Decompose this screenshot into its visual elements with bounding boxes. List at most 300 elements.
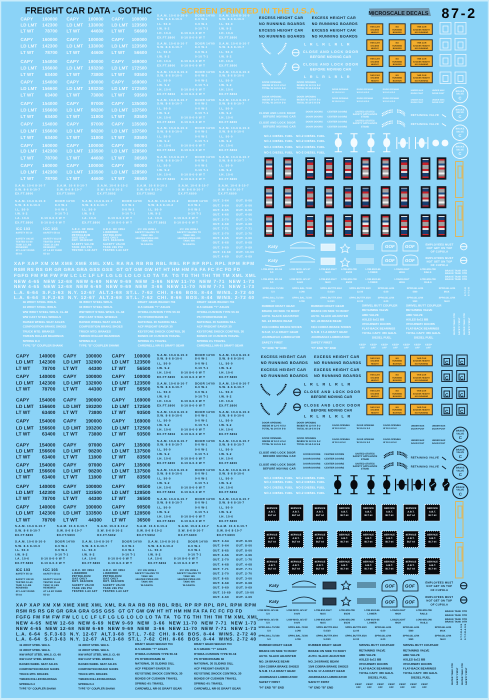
panel: black stenciled stamps: SERVICE bbox=[315, 507, 326, 510]
panel: white reporting marks and dates: FGFG FM FM FW FW LC LC LF LF LG LG LO LO LO TA TA TG TG THI THI TM TM XML XML bbox=[14, 273, 256, 278]
panel: lower right equipment lists: DIESEL FUEL bbox=[368, 676, 387, 680]
panel: white equipment lists: RAISED WHEEL SEAT AXLES bbox=[23, 320, 65, 324]
panel: upper low-mod and spring rows bbox=[261, 268, 467, 303]
panel: white dimension data blocks: S.W. 8-6 8-10-0 bbox=[219, 130, 244, 134]
panel: white dimension data blocks: 8-10 8-0-0 W T bbox=[108, 220, 132, 224]
panel: black reporting marks and dates: FGFG FM FM FW FW LC LC LF LF LG LG LO LO LO TA TA TG TG THI THI TM TM XML XML bbox=[16, 614, 258, 619]
panel: white dimension data blocks: 8-10 8-0-0 W T bbox=[108, 216, 132, 220]
panel: lower small stencils: CENTER DOORS bbox=[324, 467, 345, 470]
panel: lower yellow placards: BOARDS bbox=[393, 395, 402, 398]
panel: white capacity data: 169000 bbox=[132, 79, 147, 84]
panel: upper low-mod and spring rows: SPRG.BUTTR.6/20 bbox=[349, 297, 371, 300]
panel: upper small stencils: STAND bbox=[361, 125, 369, 128]
panel: upper white ring emblems: VALVE bbox=[456, 111, 464, 114]
panel: black capacity data: 11800 bbox=[88, 475, 102, 480]
panel: lower low-mod and spring rows: LOW-80/4-66 bbox=[365, 618, 380, 621]
panel: black dimension data blocks: 8-0 W-1 bbox=[55, 544, 68, 548]
panel: black outage column: OUT. 4-66 bbox=[213, 553, 229, 557]
panel: upper railroad logos: NOT GET ON TOP bbox=[427, 247, 452, 250]
panel: white dimension data blocks: 8-0 W-1 bbox=[188, 203, 201, 207]
panel: black capacity data: CAPY bbox=[63, 374, 77, 379]
panel: upper small stencils: CENTER DOORS bbox=[327, 116, 348, 119]
panel: upper railroad logos: OF CUPOLA bbox=[431, 264, 448, 267]
panel: upper small stencils: SAFETY APPLIANCE bbox=[353, 122, 378, 125]
panel: lower railroad logos: GOF bbox=[385, 584, 395, 588]
panel: upper white ring emblems: VALVE bbox=[456, 148, 464, 151]
panel: upper railroad logos bbox=[265, 241, 467, 267]
panel: black equipment lists: BONDS OF CUSHION TRAVEL bbox=[135, 676, 178, 680]
panel: upper small stencils: DOOR DOORS bbox=[306, 125, 323, 128]
panel: lower low-mod and spring rows: SPRG.BAL.71/108 bbox=[258, 635, 280, 638]
panel: black stenciled stamps: SERVICE bbox=[291, 560, 302, 564]
panel: black dimension data blocks: EX.FT.5800 bbox=[15, 561, 34, 565]
panel: lower black ring emblems: BRAKE bbox=[456, 467, 465, 470]
panel: lower yellow placards: RUNNING bbox=[392, 392, 402, 395]
panel: black ICC stencils: TANK 14 LBS bbox=[43, 584, 59, 587]
panel: black dimension data blocks: S.A.M. 10-6 8-10-7 bbox=[178, 524, 209, 528]
panel: lower door opening data: TOTAL W 14-5 H 5-8 bbox=[262, 428, 286, 431]
panel: black reporting marks and dates: NEW 4-65 NEW 12-68 NEW 6-69 NEW 9-69 NEW 3-66 NEW 11-70 NEW 7-71 NEW 1-73 bbox=[16, 620, 256, 625]
panel: lower yellow placards: NO RUNNING bbox=[415, 379, 428, 382]
panel: black equipment lists: SPRING 4½ TRAVEL bbox=[135, 682, 164, 686]
panel: white equipment lists: COMPOSITION BRAKE SHOES bbox=[79, 324, 123, 328]
panel: upper vertical water tank stencils: S T O R bbox=[464, 287, 467, 296]
panel: upper diesel fuel text: NO-2 DIESEL FUEL bbox=[296, 134, 325, 138]
panel: lower right equipment lists: AUTO. SLACK ADJUSTER bbox=[308, 654, 346, 658]
panel: black capacity data: 140000 bbox=[39, 484, 56, 489]
panel: black stenciled stamps: BLT 64 bbox=[292, 540, 301, 544]
panel: lower right equipment lists: RUBBER DRAFT GEAR bbox=[308, 643, 342, 647]
panel: lower low-mod and spring rows: SPRG.BUTTR.6/44 bbox=[316, 626, 338, 629]
panel: black dimension data blocks: DOOR 14'00 bbox=[195, 468, 215, 472]
panel: upper door opening data: DOOR OPENING bbox=[383, 88, 399, 91]
panel: white ICC stencils: TESTED 1-60 AFT bbox=[103, 249, 129, 252]
panel: white capacity data: LD LMT bbox=[20, 43, 37, 48]
panel: lower door opening data: DOOR POST bbox=[411, 442, 425, 445]
panel: white dimension data blocks: S.A.M. 10-6 8-10-7 bbox=[219, 98, 250, 102]
panel: upper yellow placards: BOARDS bbox=[393, 63, 402, 66]
panel: white capacity data: 154000 bbox=[42, 122, 58, 127]
panel: black equipment lists bbox=[19, 642, 242, 690]
panel: lower low-mod and spring rows: RAILS bbox=[420, 622, 428, 625]
panel: upper low-mod and spring rows: 5.0/20 bbox=[328, 291, 335, 294]
panel: black dimension data blocks: S.A.M. 10-6 8-10-0 bbox=[157, 353, 188, 357]
panel: upper yellow placards: THIS CAR bbox=[370, 58, 380, 60]
panel: black equipment lists: NATIONAL 30 SLIDING SILL bbox=[194, 662, 234, 666]
panel: lower yellow placards: HEIGHT bbox=[371, 379, 379, 382]
panel: white dimension data blocks: EX.FT.5802 bbox=[219, 148, 238, 152]
panel: white dimension data blocks: DOOR 14'00 bbox=[195, 42, 215, 46]
panel: black equipment lists: SPRING D-3 bbox=[78, 683, 94, 686]
panel: lower railroad logos: Katy bbox=[269, 583, 279, 588]
panel: white ICC stencils: 55-10 bbox=[16, 252, 23, 256]
panel: lower door opening data: DOOR POST bbox=[411, 428, 425, 430]
panel: black stenciled stamps: A.B.T. bbox=[293, 510, 300, 514]
panel: lower low-mod and spring rows: 12.00 bbox=[353, 629, 360, 632]
panel: lower door opening data: DOOR OPENING bbox=[383, 424, 401, 427]
panel: white outage column: OUT. 8-00 bbox=[236, 203, 252, 207]
panel: white equipment lists: D-5 GRADE "Y" AXLES bbox=[197, 305, 229, 309]
panel: black ICC stencils: AT LA BY RUND bbox=[16, 590, 35, 593]
panel: black equipment lists: 33 WROT STEEL WHLS. bbox=[19, 649, 51, 652]
panel: black ICC stencils: SAFETY VALVE bbox=[43, 578, 62, 581]
panel: white ICC stencils: TANK 265 PSI bbox=[103, 246, 123, 249]
panel: upper door opening data: TOTAL W 14-5 H 5-8 bbox=[297, 87, 321, 90]
panel: black ICC stencils: 55-10 bbox=[16, 594, 23, 596]
panel: upper right equipment lists: RUBBER DRAFT GEAR bbox=[262, 304, 296, 308]
panel: black capacity data: 140000 bbox=[39, 505, 56, 510]
panel: white outage column: OUT. 2-70 bbox=[236, 231, 252, 235]
panel: white capacity data: 169000 bbox=[132, 59, 147, 64]
panel: black stenciled stamps: SERVICE bbox=[291, 507, 302, 510]
panel: white outage column: OUT. 9-69 bbox=[236, 245, 252, 249]
panel: upper right equipment lists: AUTO. SLACK ADJUSTER bbox=[262, 314, 300, 318]
panel: white capacity data: 93500 bbox=[134, 93, 147, 98]
panel: black dimension data blocks: 8-10 8-0-0 W T bbox=[108, 561, 132, 565]
panel: white dimension data blocks: 8-10 8-0-0 W T bbox=[181, 88, 205, 92]
panel: black dimension data blocks: EX.FT.5802 bbox=[219, 432, 238, 436]
panel: lower low-mod and spring rows: MAX bbox=[320, 622, 326, 625]
panel: white capacity data: LD LMT bbox=[20, 149, 37, 154]
panel: lower right equipment lists: 10/4 COBRA BRAKE SHOES bbox=[259, 664, 299, 668]
panel: white diesel fuel text in lower half: NO-2 DIESEL FUEL bbox=[296, 485, 325, 489]
panel: black reporting marks and dates bbox=[16, 602, 258, 642]
panel: black equipment lists: BONDS OF CUSHION TRAVEL bbox=[194, 676, 237, 680]
panel: white dimension data blocks: 9-10 T-1 bbox=[188, 212, 202, 216]
panel: black outage column: OUT. 8-68 bbox=[213, 581, 229, 585]
panel: white capacity data: CAPY bbox=[20, 163, 33, 168]
panel: lower yellow placards: NO RUNNING bbox=[415, 411, 428, 414]
panel: upper low-mod and spring rows: 60/20 bbox=[346, 281, 353, 284]
panel: upper door opening data: TOTAL W 14-5 H 5-8 bbox=[262, 87, 286, 90]
panel: black ICC stencils: RENEWED bbox=[16, 587, 28, 590]
panel: black capacity data: CAPY bbox=[63, 419, 77, 424]
panel: upper yellow placards: THIS CAR bbox=[417, 42, 427, 44]
panel: upper right equipment lists: ABD VALVE bbox=[362, 313, 379, 317]
panel: white dimension data blocks: I.H. 10-6 bbox=[219, 59, 233, 63]
panel: white diesel fuel text in lower half: NO-1 DIESEL FUEL bbox=[264, 485, 293, 489]
panel: lower excess height text: EXCESS HEIGHT CAR bbox=[261, 368, 306, 372]
panel: black ICC stencils: SAFETY 55-10 bbox=[16, 572, 33, 575]
panel: white dimension data blocks: I.W. 9-2 bbox=[157, 54, 170, 58]
panel: white equipment lists: CARDWELL NR-91 DRAFT GEAR bbox=[197, 344, 244, 348]
panel: black capacity data: LT WT bbox=[16, 410, 30, 415]
panel: white capacity data: LD LMT bbox=[20, 170, 37, 175]
panel: upper railroad logos: NOT GET ON TOP bbox=[427, 260, 452, 263]
panel: black stenciled stamps: SERVICE bbox=[315, 560, 326, 564]
lower L R markers: L R L R L R L R bbox=[304, 415, 352, 419]
panel: white capacity data: LT WT bbox=[66, 72, 80, 77]
panel: white capacity data: 73800 bbox=[91, 93, 104, 98]
panel: black capacity data: CAPY bbox=[112, 442, 126, 447]
panel: black capacity data: 100000 bbox=[86, 374, 102, 379]
panel: black stenciled stamps: A.B.T. bbox=[293, 537, 300, 540]
panel: upper right equipment lists: AUTO. SLACK ADJUSTER bbox=[311, 314, 349, 318]
panel: white capacity data: CAPY bbox=[66, 163, 79, 168]
panel: black stenciled stamps: BLT 64 bbox=[385, 514, 394, 517]
panel: white equipment lists: NATIONAL 30 SLIDING SILL bbox=[197, 320, 236, 324]
panel: upper yellow placards: HEIGHT bbox=[371, 63, 379, 66]
panel: white outage column: OUT. 4-68 bbox=[236, 222, 252, 226]
panel: black dimension data blocks: 8-10 8-0-0 W T bbox=[181, 490, 205, 494]
panel: black capacity data: CAPY bbox=[63, 353, 77, 358]
panel: white dimension data blocks: I.W. 9-2 bbox=[157, 83, 170, 87]
panel: black capacity data: LT WT bbox=[63, 496, 78, 501]
panel: upper yellow placards: THIS CAR bbox=[417, 74, 427, 77]
panel: upper keep off stencils: KEEP bbox=[392, 344, 399, 346]
panel: black outage column: OUT. 4-66 bbox=[236, 553, 252, 557]
panel: black capacity data: LT WT bbox=[112, 387, 126, 392]
panel: upper door opening data: UNDER MAX bbox=[411, 98, 424, 101]
panel: white dimension data blocks: EX.FT.5800 bbox=[15, 220, 34, 224]
panel: lower door opening data: DOOR OPENING bbox=[357, 438, 374, 441]
panel: lower right equipment lists: SWIVEL BUTT COUPLER bbox=[403, 643, 439, 647]
panel: black ICC stencils: DOT. 1E4200W bbox=[72, 580, 93, 583]
panel: lower keep off stencils: KEEP bbox=[355, 683, 362, 686]
panel: white capacity data: LD LMT bbox=[66, 86, 83, 91]
panel: black capacity data: 154000 bbox=[39, 398, 56, 403]
panel: upper low-mod and spring rows: SPRG.BL.6/44 bbox=[407, 297, 424, 300]
panel: white equipment lists: TIMKEN ROLLER BEARINGS bbox=[23, 334, 64, 338]
panel: white dimension data blocks: 8-10 8-0-0 W T bbox=[41, 220, 65, 224]
panel: black dimension data blocks: 8-10 8-0-0 W T bbox=[181, 399, 205, 403]
panel: black equipment lists: WW CAST STEEL WHEELS bbox=[19, 658, 55, 661]
brand logo bbox=[368, 8, 431, 17]
panel: lower right equipment lists: SAFETY FIRST bbox=[308, 680, 330, 684]
panel: lower low-mod and spring rows: SPRG.BUTTR.6/20 bbox=[345, 635, 367, 638]
panel: lower yellow placards: THIS CAR bbox=[370, 357, 380, 360]
panel: black ICC stencils: GAS ONLY bbox=[103, 578, 118, 580]
panel: black outage column: OUT. 9-69 bbox=[236, 586, 252, 590]
panel: black equipment lists: DRAFT GEAR-WAUGH 703 bbox=[194, 642, 232, 646]
panel: black equipment lists: SPRING D-3 bbox=[19, 683, 35, 686]
panel: black outage column: OUT. 8-65 bbox=[213, 576, 229, 580]
panel: black stenciled stamps: SERVICE bbox=[339, 507, 350, 510]
panel: upper door opening data: DOOR OPENING bbox=[332, 97, 349, 100]
panel: upper door opening data: INSIDE W 12-0 H 5-2 bbox=[262, 84, 286, 87]
panel: black stenciled stamps: SERVICE bbox=[363, 507, 374, 510]
panel: black capacity data: 63400 bbox=[42, 455, 56, 460]
panel: upper yellow placards: THIS CAR bbox=[417, 58, 427, 60]
panel: white capacity data: 100000 bbox=[88, 163, 104, 168]
panel: lower low-mod and spring rows: SPRG.BL.6/44 bbox=[375, 626, 392, 629]
panel: lower yellow placards: EXCESS HEIGHT bbox=[413, 376, 431, 379]
panel: black stenciled stamps: A.B.T. bbox=[408, 510, 415, 514]
panel: white equipment lists: PS HYDROFRAME 60 bbox=[138, 315, 168, 319]
panel: upper low-mod and spring rows: BRAKE TANK OTR bbox=[445, 272, 467, 275]
panel: upper low-mod and spring rows: LOW-80/LOW bbox=[341, 268, 358, 271]
panel: lower right equipment lists: FLAT-BACK BEARINGS bbox=[359, 666, 392, 670]
panel: lower right equipment lists: ABD VALVE bbox=[359, 653, 376, 657]
panel: white dimension data blocks: I.L. 50-0 bbox=[157, 79, 171, 83]
panel: lower retaining valve labels: RETAINING VALVE bbox=[411, 457, 439, 460]
panel: lower right equipment lists: N.S.M. 17-A DRAFT GEAR bbox=[259, 669, 296, 673]
panel: white ICC stencils: A.E.C. OF 3994 bbox=[72, 228, 94, 231]
panel: upper right equipment lists: DIESEL FUEL bbox=[372, 336, 391, 340]
panel: white capacity data: LD LMT bbox=[66, 128, 83, 133]
panel: black dimension data blocks: I.W. 9-2 bbox=[219, 366, 232, 370]
panel: upper low-mod and spring rows: BRAKE TANK OTR bbox=[445, 278, 467, 281]
panel: lower low-mod and spring rows: SPRG.BL.6/44 bbox=[435, 635, 452, 638]
panel: black dimension data blocks: S.W. 8-6 8-10-7 bbox=[57, 529, 82, 533]
panel: black capacity data: 100000 bbox=[134, 374, 151, 379]
panel: lower low-mod and spring rows: HIGH bbox=[395, 622, 401, 625]
panel: white dimension data blocks: I.H. 10-6 bbox=[157, 116, 171, 120]
panel: lower excess height text: NO RUNNING BOARDS bbox=[261, 361, 308, 365]
panel: lower right equipment lists: SWIVEL BUTT COUPLER bbox=[359, 643, 395, 647]
panel: upper yellow placards: HEIGHT bbox=[371, 31, 379, 34]
panel: black equipment lists: D-5 GRADE "Y" AXLES bbox=[194, 647, 227, 651]
panel: upper yellow placards: BOARDS bbox=[393, 47, 402, 50]
panel: upper door opening data: UNDER MAX bbox=[411, 89, 424, 92]
panel: upper low-mod and spring rows: 5/80 bbox=[413, 300, 418, 303]
panel: white capacity data: LT WT bbox=[20, 50, 34, 55]
panel: white ICC stencils: ICC 105 100W-1 bbox=[180, 228, 199, 231]
panel: black equipment lists: WW WROT STEEL WHLS. CL-68 bbox=[19, 654, 61, 656]
panel: white capacity data: LD LMT bbox=[20, 66, 37, 70]
panel: black capacity data: LD LMT bbox=[63, 380, 81, 385]
panel: lower door opening data: DOOR POST bbox=[432, 428, 446, 430]
panel: upper low-mod and spring rows: 5.0/20 bbox=[328, 300, 335, 303]
panel: white ICC stencils: TANK 400 bbox=[183, 240, 195, 242]
panel: white dimension data blocks: I.L. 50-0 bbox=[157, 22, 171, 26]
panel: black capacity data: 98200 bbox=[88, 448, 102, 453]
panel: upper low-mod and spring rows: SPRG.BAL.71/60 bbox=[292, 297, 312, 300]
panel: white dimension data blocks: I.L. 50-0 bbox=[157, 164, 171, 168]
panel: upper low-mod and spring rows: 5.0 bbox=[270, 281, 274, 284]
panel: white dimension data blocks: S.A.M. 10-6 8-10-7 bbox=[15, 184, 46, 188]
panel: white dimension data blocks: EX.FT.5800 bbox=[157, 177, 176, 181]
panel: white outage column: OUT. 9-69 bbox=[213, 245, 229, 249]
panel: upper door opening data: W 12-0 H 5-2 bbox=[383, 100, 396, 103]
panel: lower yellow placards: THIS CAR bbox=[416, 390, 427, 392]
panel: black stenciled stamps: A.B.T. bbox=[269, 564, 276, 567]
panel: white dimension data blocks: 9-0 W-1 bbox=[122, 207, 135, 211]
panel: black capacity data: LD LMT bbox=[63, 490, 81, 495]
panel: white capacity data: 154000 bbox=[42, 59, 58, 64]
panel: white capacity data: LT WT bbox=[66, 114, 80, 119]
panel: white capacity data: LD LMT bbox=[66, 170, 83, 175]
panel: white capacity data: 154000 bbox=[42, 101, 58, 106]
panel: lower door opening data: W 12-0 H 5-2 bbox=[383, 427, 397, 430]
panel: white dimension data blocks: EX.FT.5802 bbox=[219, 92, 238, 96]
panel: lower low-mod and spring rows: 6.00 bbox=[381, 629, 386, 632]
panel: black capacity data: 83500 bbox=[137, 455, 151, 460]
panel: black outage column: OUT. 4-68 bbox=[236, 562, 252, 566]
panel: black stenciled stamps: SERVICE bbox=[291, 534, 302, 536]
panel: black ICC stencils: DOT. 1E4200W bbox=[103, 580, 124, 583]
panel: lower low-mod and spring rows: 5.0 bbox=[267, 638, 271, 641]
panel: black dimension data blocks: I.W. 9-2 bbox=[82, 552, 95, 556]
panel: black dimension data blocks: 8-10 8-0-0 W T bbox=[181, 371, 205, 375]
panel: upper low-mod and spring rows: HIGH bbox=[399, 281, 405, 284]
panel: lower black ring emblems: VALVE bbox=[456, 432, 465, 435]
panel: lower keep off stencils: KEEP bbox=[399, 683, 406, 686]
panel: black stenciled stamps: A.B.T. bbox=[317, 510, 324, 514]
panel: black outage column: OUT. 10-69 bbox=[213, 590, 231, 594]
panel: lower vertical water tank stencils bbox=[451, 623, 468, 685]
panel: upper retaining valve labels: RETAINING VALVE bbox=[411, 123, 439, 126]
panel: white dimension data blocks: 8-10 8-0-0 W T bbox=[174, 216, 198, 220]
panel: white capacity data bbox=[20, 16, 147, 181]
panel: upper yellow placards: NO RUNNING bbox=[415, 63, 429, 66]
panel: upper white ring emblems bbox=[452, 87, 468, 158]
panel: upper right equipment lists: 3'FOURWAY DOORS bbox=[406, 322, 435, 326]
panel: white capacity data: LT WT bbox=[66, 135, 80, 140]
panel: white dimension data blocks: I.L. 50-0 bbox=[219, 135, 233, 139]
panel: black dimension data blocks: I.L. 50-0 bbox=[219, 362, 233, 366]
panel: black ICC stencils: LINDERED bbox=[72, 572, 87, 575]
panel: lower yellow placards: EXCESS bbox=[371, 376, 380, 379]
panel: lower low-mod and spring rows: SPRG.BUTTR.6/20 bbox=[345, 626, 367, 629]
panel: black dimension data blocks: S.W. 8-6 8-10-0 bbox=[157, 472, 182, 476]
panel: white dimension data blocks: S.A.M. 10-6 8-10-7 bbox=[219, 42, 250, 46]
panel: black dimension data blocks: 8-10 8-0-0 W T bbox=[41, 557, 65, 561]
panel: lower door opening data: TOTAL W 14-5 H 5-8 bbox=[262, 443, 286, 446]
panel: upper door opening data: W 12-0 H 5-2 bbox=[357, 91, 370, 94]
panel: white capacity data: 44600 bbox=[91, 176, 104, 181]
panel: black stenciled stamps: BLT 64 bbox=[268, 568, 277, 570]
panel: black dimension data blocks: S.W. 8-6 8-10-7 bbox=[157, 501, 182, 505]
panel: black capacity data: 137500 bbox=[134, 469, 151, 474]
panel: white outage column: OUT. 8-00 bbox=[236, 208, 252, 212]
panel: upper door opening data: DOOR OPENING bbox=[262, 96, 282, 98]
panel: white capacity data: 36500 bbox=[134, 176, 147, 181]
panel: lower yellow placards: NO bbox=[396, 390, 399, 392]
panel: upper keep off stencils: KEEP bbox=[359, 344, 366, 346]
panel: lower keep off stencils: KEEP bbox=[421, 683, 428, 686]
panel: white capacity data: 160000 bbox=[42, 16, 58, 22]
panel: white ICC stencils: TESTED 10-60 bbox=[16, 240, 33, 244]
panel: upper low-mod and spring rows: 5.0 bbox=[270, 271, 274, 274]
panel: upper door opening data: W 12-0 H 5-2 bbox=[332, 100, 345, 103]
panel: lower right equipment lists: 10/4 COBRA BRAKE SHOES bbox=[308, 664, 348, 668]
panel: white capacity data: 44600 bbox=[91, 155, 104, 160]
panel: black outage column: OUT. 9-64 bbox=[213, 544, 229, 548]
panel: upper excess height text bbox=[259, 16, 358, 38]
panel: white capacity data: 63400 bbox=[45, 93, 58, 98]
panel: black capacity data: 156600 bbox=[39, 425, 56, 430]
panel: lower door opening data: TOTAL W 14-5 H 5-8 bbox=[297, 428, 321, 431]
panel: black capacity data: LD LMT bbox=[16, 490, 34, 495]
panel: black capacity data: CAPY bbox=[63, 462, 77, 467]
panel: white capacity data: LT WT bbox=[20, 155, 34, 160]
panel: upper close and lock door text: CLOSE AND LOCK DOOR bbox=[303, 63, 358, 67]
panel: white ICC stencils: ICC 105 100W-1 bbox=[138, 228, 157, 231]
panel: black dimension data blocks: 8-10 8-0-0 W T bbox=[41, 561, 65, 565]
panel: black capacity data: CAPY bbox=[16, 505, 30, 510]
panel: black stenciled stamps: SERVICE bbox=[267, 560, 278, 564]
panel: black capacity data: LT WT bbox=[16, 455, 30, 460]
panel: white dimension data blocks: EX.FT.5800 bbox=[219, 64, 238, 68]
panel: white dimension data blocks: 8-10 8-0-0 W T bbox=[181, 116, 205, 120]
panel: white equipment lists: RAISED WHEEL SEAT AXLES bbox=[79, 320, 121, 324]
panel: white dimension data blocks: S.W. 8-6 8-10-7 bbox=[157, 102, 182, 106]
panel: black capacity data: LD LMT bbox=[112, 469, 129, 474]
panel: upper low-mod and spring rows: LOW-MOD. 8/1-57 bbox=[290, 278, 311, 281]
panel: white dimension data blocks: 9-0 W-1 bbox=[195, 22, 208, 26]
panel: black equipment lists: HYDRA-CUSHION TYPE 50-18 bbox=[135, 652, 178, 656]
panel: upper right equipment lists: 10/4 COBRA BRAKE SHOES bbox=[311, 325, 351, 329]
panel: white capacity data: 160000 bbox=[42, 37, 58, 42]
panel: upper low-mod and spring rows: BRAKE TANK OTR bbox=[445, 276, 467, 278]
panel: upper yellow placards: RUNNING bbox=[392, 44, 402, 47]
panel: white capacity data: CAPY bbox=[112, 101, 124, 106]
panel: black capacity data: LD LMT bbox=[16, 511, 34, 516]
panel: upper low-mod and spring rows: SPRG.BL.6/44 bbox=[378, 297, 395, 300]
panel: black capacity data: 100000 bbox=[134, 353, 151, 358]
panel: lower door opening data: W 12-0 H 5-2 bbox=[357, 441, 371, 444]
